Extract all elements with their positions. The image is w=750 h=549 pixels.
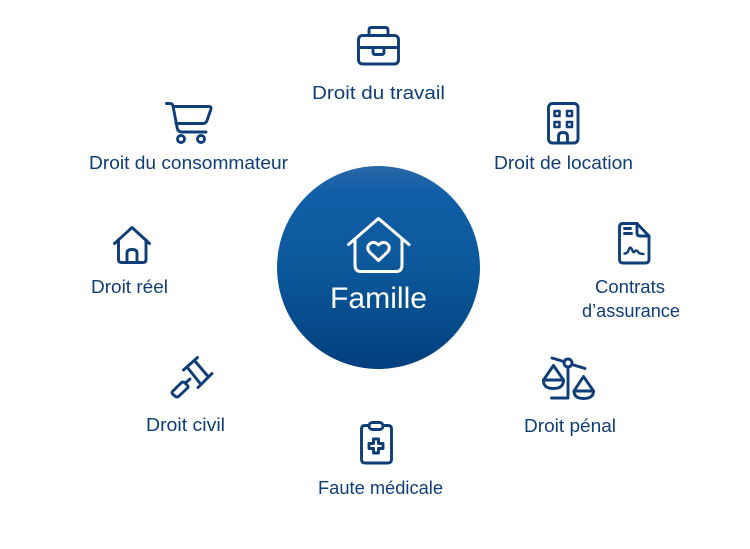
label: Droit civil: [146, 414, 225, 435]
label: Droit de location: [494, 152, 633, 173]
label: [582, 276, 680, 321]
label: Contrats: [595, 276, 665, 297]
label: Droit du consommateur: [89, 152, 288, 173]
icon: document: [620, 224, 649, 263]
item: Droit du travail: [312, 28, 445, 103]
item: Droit de location: [494, 104, 633, 173]
item: Contrats d'assurance: [582, 224, 680, 321]
icon: gavel: [172, 358, 212, 397]
item: Faute médicale: [318, 422, 443, 498]
item: Droit réel: [91, 228, 168, 297]
label: Droit du travail: [312, 82, 445, 103]
central label: Famille: [330, 282, 427, 315]
label: d’assurance: [582, 300, 680, 321]
icon: building: [548, 104, 578, 143]
icon: shopping cart: [166, 104, 211, 142]
icon: house with heart: [348, 218, 409, 272]
item: Droit pénal: [524, 358, 616, 436]
label: Droit pénal: [524, 415, 616, 436]
item: Droit du consommateur: [89, 104, 288, 173]
label: Droit réel: [91, 276, 168, 297]
icon: house: [114, 228, 150, 262]
label: Faute médicale: [318, 477, 443, 498]
icon: clipboard with cross: [362, 422, 392, 463]
icon: briefcase: [358, 28, 398, 64]
central circle: Famille: [277, 166, 480, 369]
item: Droit civil: [146, 358, 225, 435]
icon: scales of justice: [543, 358, 594, 398]
